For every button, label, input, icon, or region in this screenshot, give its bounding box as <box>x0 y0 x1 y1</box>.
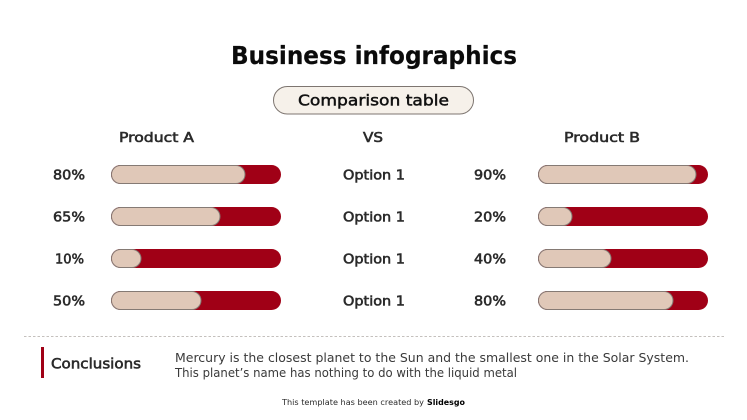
row 1: 90% <box>474 168 506 184</box>
conclusions label: Conclusions <box>51 356 141 372</box>
row 1: Option 1 <box>343 168 405 184</box>
row 3: Option 1 <box>343 252 405 268</box>
row 3: 10% <box>55 252 84 268</box>
row 1 <box>53 165 708 184</box>
column heading: Product A: Product A <box>119 130 195 146</box>
row 3: 40% <box>474 252 506 268</box>
row 4: Option 1 <box>343 294 405 310</box>
conclusions label <box>41 347 141 378</box>
row 2: Option 1 <box>343 210 405 226</box>
row 2 <box>53 207 708 226</box>
row 4 <box>53 291 708 310</box>
row 4: 50% <box>53 294 85 310</box>
subtitle pill: Comparison table <box>298 92 449 110</box>
conclusions text <box>174 350 689 380</box>
conclusions text: This planet’s name has nothing to do with the liquid metal <box>174 365 517 380</box>
row 1: 80% <box>53 168 85 184</box>
row 2: 20% <box>474 210 506 226</box>
row 4: 80% <box>474 294 506 310</box>
column heading: Product B: Product B <box>564 130 640 146</box>
footer credit: This template has been created by <box>281 398 425 407</box>
conclusions text: Mercury is the closest planet to the Sun and the smallest one in the Solar System. <box>175 350 689 365</box>
subtitle pill <box>274 86 474 114</box>
column heading: VS: VS <box>363 130 383 146</box>
footer credit: Slidesgo <box>427 398 465 407</box>
row 3 <box>55 249 708 268</box>
title: Business infographics <box>231 41 517 70</box>
row 2: 65% <box>53 210 85 226</box>
